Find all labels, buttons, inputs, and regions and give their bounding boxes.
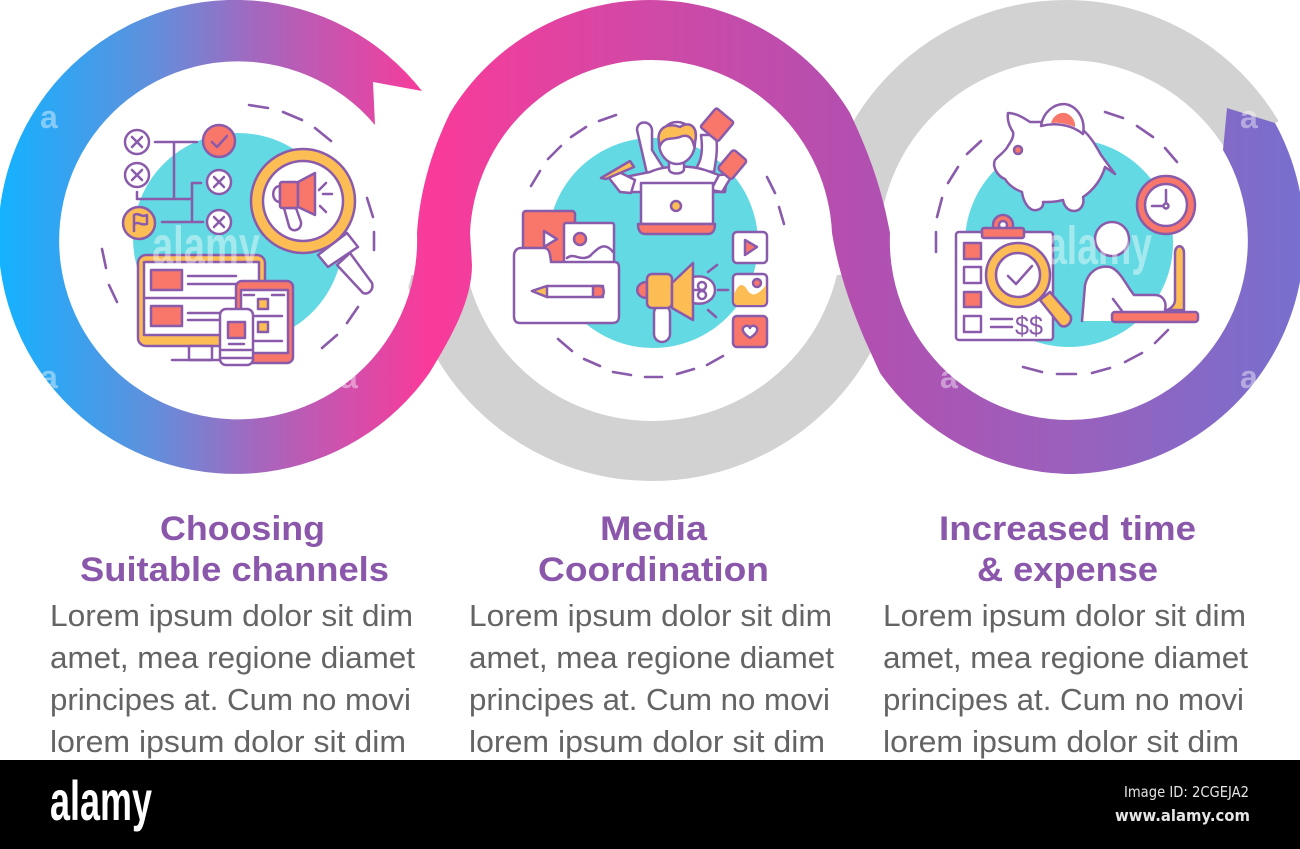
white disc: right step	[887, 237, 1245, 416]
grey ring: middle step	[408, 275, 870, 481]
step 3 body text: principes at. Cum no movi	[883, 682, 1244, 717]
dashed orbit 2	[531, 115, 784, 377]
dashed orbit 3	[936, 112, 1177, 374]
step 2 heading	[538, 510, 769, 589]
megaphone	[637, 263, 728, 342]
media tiles	[733, 232, 767, 347]
magnifier with check	[986, 243, 1071, 326]
watermark marks: a	[1240, 99, 1258, 135]
footer logo: alamy	[50, 769, 152, 832]
white disc: middle step	[470, 59, 832, 421]
step 2 heading: Media	[600, 510, 708, 548]
cyan backdrop 2	[548, 138, 758, 348]
step 1 body text: amet, mea regione diamet	[50, 640, 415, 675]
step 3 body text: Lorem ipsum dolor sit dim	[883, 598, 1246, 633]
watermark marks: a	[340, 359, 358, 395]
stock photo footer bar	[0, 760, 1300, 849]
watermark marks: a	[40, 99, 58, 135]
step 2 body text: Lorem ipsum dolor sit dim	[469, 598, 832, 633]
phone	[220, 309, 253, 365]
decision tree	[123, 125, 235, 239]
watermark marks: a	[940, 359, 958, 395]
step 1 heading: Suitable channels	[80, 551, 389, 589]
piggy bank	[994, 104, 1115, 211]
watermark marks: alamy	[152, 216, 260, 276]
image id: Image ID: 2CGEJA2	[1124, 783, 1249, 801]
step 2 body text: amet, mea regione diamet	[469, 640, 834, 675]
gradient ribbon with arrow	[0, 0, 1300, 474]
step 1 body text	[50, 598, 415, 759]
cyan backdrop 1	[133, 133, 343, 343]
step 1 body text: principes at. Cum no movi	[50, 682, 411, 717]
step 3 heading: Increased time	[939, 510, 1196, 548]
dollar signs: $$	[1015, 311, 1043, 341]
desktop monitor	[138, 255, 265, 360]
magnifier with megaphone	[251, 149, 372, 293]
grey ring: right step	[827, 0, 1278, 205]
icon 3: increased time and expense	[936, 104, 1198, 374]
clock	[1137, 176, 1195, 234]
dashed orbit 1	[102, 105, 374, 348]
clipboard checklist	[956, 215, 1053, 341]
watermark marks: a	[1240, 359, 1258, 395]
step 3 heading	[939, 510, 1196, 589]
step 2 body text	[469, 598, 834, 759]
cyan backdrop 3	[965, 139, 1173, 347]
step 3 body text	[883, 598, 1248, 759]
step 3 heading: & expense	[977, 551, 1158, 589]
person at laptop	[1082, 222, 1198, 322]
step 2 body text: principes at. Cum no movi	[469, 682, 830, 717]
step 2 heading: Coordination	[538, 551, 769, 589]
multitasking person	[601, 108, 747, 234]
tablet	[236, 281, 293, 363]
step 1 body text: lorem ipsum dolor sit dim	[50, 724, 406, 759]
step 1 body text: Lorem ipsum dolor sit dim	[50, 598, 413, 633]
icon 2: media coordination	[514, 108, 784, 377]
watermark marks: alamy	[1046, 216, 1152, 276]
icon 1: choosing channels	[102, 105, 374, 365]
step 1 heading	[80, 510, 389, 589]
website: www.alamy.com	[1115, 806, 1250, 825]
step 3 body text: amet, mea regione diamet	[883, 640, 1248, 675]
step 3 body text: lorem ipsum dolor sit dim	[883, 724, 1239, 759]
step 1 heading: Choosing	[160, 510, 325, 548]
folder with media	[514, 211, 619, 323]
step 2 body text: lorem ipsum dolor sit dim	[469, 724, 825, 759]
watermark marks: a	[40, 359, 58, 395]
watermark marks	[40, 99, 1258, 395]
white disc: left step	[58, 58, 416, 416]
